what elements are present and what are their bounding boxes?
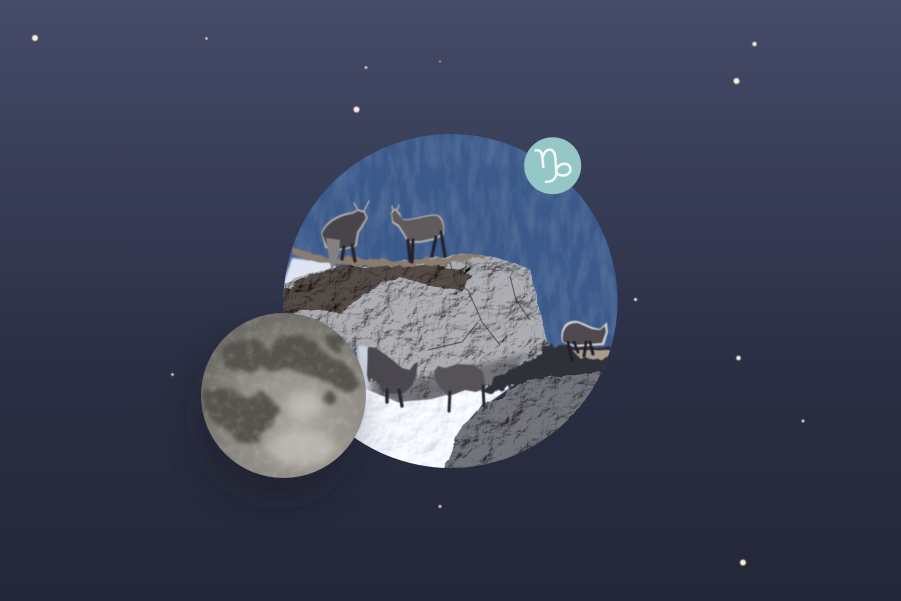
moon surface texture (201, 313, 366, 478)
photo circle: ibexes on a rock (281, 134, 619, 470)
stars (32, 35, 804, 566)
ibex 1 (321, 201, 369, 272)
sky backdrop: blue mountainside (283, 134, 619, 374)
boulder cracks (428, 262, 530, 350)
moon highlights (268, 391, 336, 466)
moon maria (204, 334, 358, 445)
ibex 2 (391, 205, 445, 262)
ledge: dark brown vegetation (281, 264, 470, 314)
right dark ledge (482, 344, 612, 394)
ibex 4 (367, 347, 418, 406)
upper snow patch (284, 256, 337, 290)
main boulder (281, 254, 548, 406)
moon disc (201, 313, 366, 478)
snow strip beside ibex (358, 345, 370, 392)
icon: capricorn glyph (536, 150, 570, 182)
lower snow field (350, 382, 518, 470)
moon (201, 313, 366, 478)
lower right rock slope (443, 372, 600, 470)
boulder shaded base (372, 352, 530, 408)
badge disc (524, 137, 581, 194)
sunlit patch on right ledge (572, 350, 610, 360)
ibex 5 (434, 364, 486, 411)
capricorn badge (524, 137, 581, 194)
moon drop shadow (198, 338, 358, 498)
ledge: sunlit crest (292, 247, 484, 267)
ibex 3 (561, 321, 608, 360)
